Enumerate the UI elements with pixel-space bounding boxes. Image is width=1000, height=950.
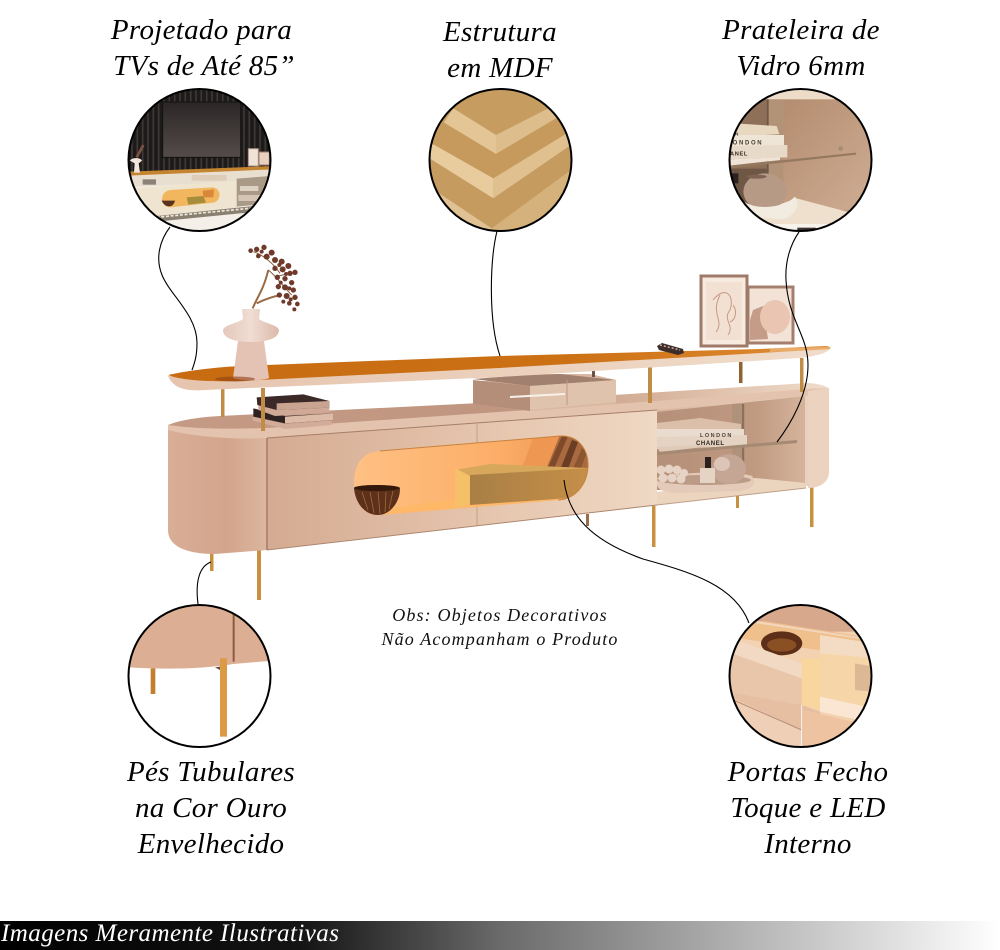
connector line: glass shelf callout bbox=[777, 232, 808, 442]
circle photo: TV room bbox=[128, 88, 272, 232]
circle photo: glass shelf bbox=[728, 88, 872, 232]
heading: pés tubulares: Pés Tubulares bbox=[127, 756, 295, 788]
circle photo: touch doors and LED bbox=[728, 604, 872, 748]
wooden bowl bbox=[354, 485, 400, 515]
circle photo: glass shelf: N bbox=[735, 131, 739, 136]
heading: prateleira de vidro: Vidro 6mm bbox=[736, 50, 866, 82]
books stack on top bbox=[253, 394, 333, 429]
open shelf section bbox=[657, 388, 829, 505]
glass shelf bbox=[657, 440, 797, 455]
circle photo: glass shelf: ANEL bbox=[730, 151, 748, 157]
tray with decor bbox=[656, 454, 754, 493]
heading: projetado para TVs: TVs de Até 85” bbox=[113, 50, 295, 82]
heading: pés tubulares: na Cor Ouro bbox=[135, 792, 287, 824]
note: decorative objects: Não Acompanham o Produto bbox=[380, 629, 619, 649]
circle photo: glass shelf: ONDON bbox=[733, 141, 763, 147]
heading: estrutura em MDF: em MDF bbox=[447, 52, 553, 84]
heading: portas fecho toque: Interno bbox=[763, 828, 852, 860]
connector line: legs callout bbox=[197, 562, 211, 604]
connector line: LED door callout bbox=[564, 480, 749, 623]
picture frames bbox=[701, 276, 793, 346]
shelf posts bbox=[221, 358, 804, 431]
heading: portas fecho toque: Portas Fecho bbox=[728, 756, 888, 788]
books on lower shelf bbox=[657, 418, 747, 452]
heading: prateleira de vidro: Prateleira de bbox=[722, 14, 880, 46]
TV console furniture bbox=[168, 245, 830, 600]
upper shelf bbox=[168, 346, 830, 390]
game console bbox=[473, 374, 616, 411]
heading: estrutura em MDF: Estrutura bbox=[443, 16, 557, 48]
note: decorative objects: Obs: Objetos Decorativos bbox=[392, 605, 608, 625]
connector line: TV callout bbox=[159, 227, 197, 370]
connector line: MDF callout bbox=[491, 231, 500, 356]
heading: pés tubulares: Envelhecido bbox=[137, 828, 284, 860]
heading: projetado para TVs: Projetado para bbox=[111, 14, 292, 46]
footer gradient bar bbox=[0, 920, 1000, 950]
lit oval niche bbox=[354, 436, 588, 515]
books on lower shelf: LONDON bbox=[700, 433, 733, 439]
circle photo: MDF boards bbox=[428, 88, 572, 232]
circle photo: tubular legs bbox=[128, 604, 272, 748]
books on lower shelf: CHANEL bbox=[696, 441, 725, 447]
vase with dried branch bbox=[215, 245, 300, 382]
oval rim bbox=[380, 436, 588, 500]
footer disclaimer text: Imagens Meramente Ilustrativas bbox=[0, 920, 339, 947]
front legs bbox=[210, 485, 814, 600]
cabinet body bbox=[168, 383, 829, 554]
remote control bbox=[657, 343, 684, 355]
heading: portas fecho toque: Toque e LED bbox=[730, 792, 886, 824]
